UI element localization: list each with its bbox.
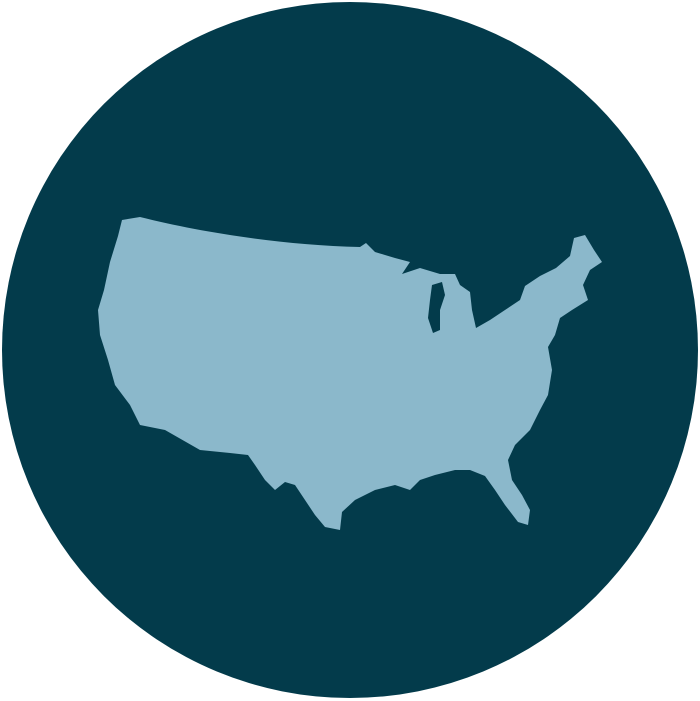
lake michigan xyxy=(428,282,445,333)
map: contiguous United States xyxy=(98,217,602,530)
